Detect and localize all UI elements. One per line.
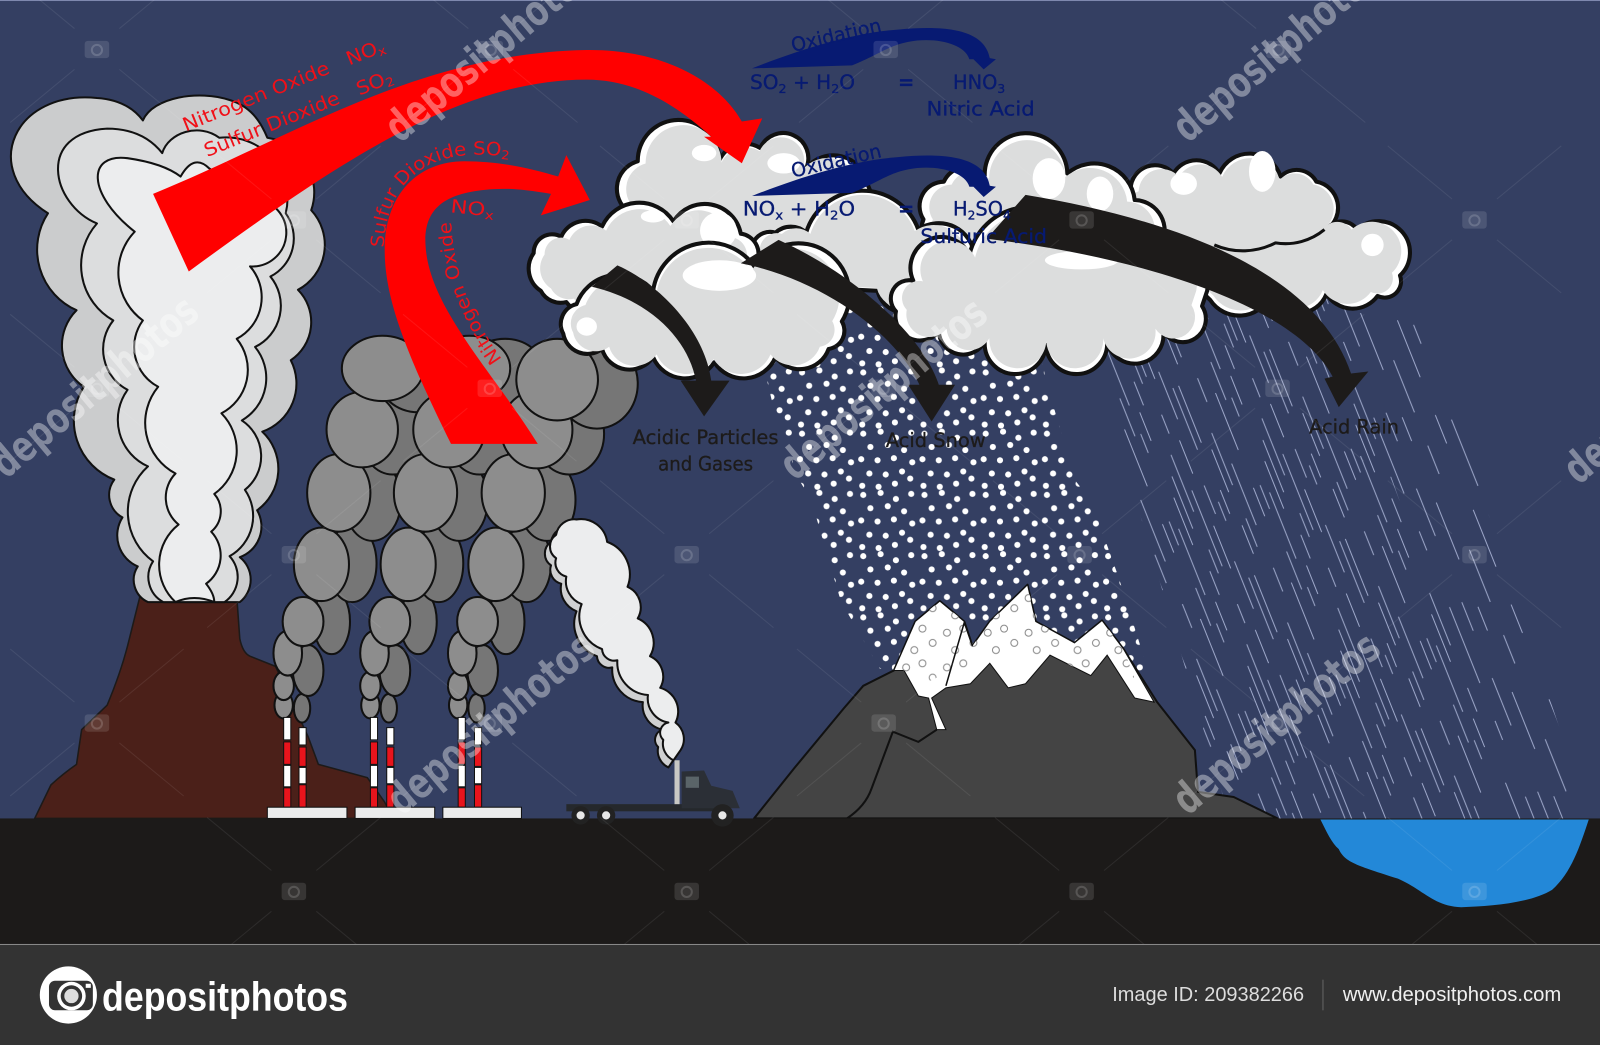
formula SO2 + H2O: + H: [787, 71, 831, 94]
front smoke columns: [273, 336, 598, 718]
equals sign: =: [898, 197, 914, 220]
mountain: [754, 585, 1278, 818]
volcano smoke plume: [11, 95, 325, 602]
label: nitrogen oxide: Nitrogen Oxide NO: [179, 45, 363, 136]
label: sulfur dioxide: Sulfur Dioxide SO: [201, 75, 373, 162]
oxidation label: Oxidation: [789, 139, 883, 182]
formula H2SO4: 2: [968, 208, 975, 222]
curved label: nitrogen oxide: Nitrogen Oxide: [438, 223, 501, 366]
equation: nitric acid: [750, 14, 1035, 120]
label: nitrogen oxide: x: [376, 43, 389, 59]
cloud front left: [561, 243, 850, 378]
formula HNO3: HNO: [953, 71, 997, 94]
truck cab: [682, 770, 740, 808]
truck flatbed: [566, 804, 719, 811]
snow dots: [759, 306, 1158, 704]
label: NOx: x: [484, 208, 494, 223]
label: acid rain: Acid Rain: [1309, 416, 1399, 439]
diagonal watermarks: depositphotos: [377, 623, 605, 825]
plume middle layer: [58, 129, 294, 602]
diagonal watermarks: depositphotos: [770, 288, 997, 490]
formula H2SO4: 4: [1003, 208, 1011, 222]
formula NOx + H2O: 2: [830, 208, 838, 222]
factory smoke: [273, 336, 638, 723]
cloud large right front: [891, 207, 1208, 374]
plume inner layer: [98, 158, 286, 602]
label: acidic particles and gases: Acidic Particles: [633, 426, 779, 449]
factory chimneys: [267, 717, 521, 818]
oxidation label: Oxidation: [789, 14, 883, 57]
formula HNO3: 3: [997, 82, 1005, 96]
nitric acid label: Nitric Acid: [927, 97, 1035, 120]
formula H2SO4: SO: [975, 197, 1003, 220]
ground: [0, 818, 1600, 944]
blue arrow: oxidation 1: [752, 28, 996, 69]
cloud top left: [617, 120, 888, 245]
curved label: sulfur dioxide: 2: [502, 150, 508, 160]
black arrow: acid snow: [741, 240, 955, 421]
clouds: [529, 120, 1410, 378]
formula SO2 + H2O: 2: [831, 82, 839, 96]
curved label: sulfur dioxide: Sulfur Dioxide SO: [370, 141, 500, 246]
formula NOx + H2O: x: [775, 208, 783, 222]
footer bar: [0, 944, 1600, 1045]
volcano: [35, 596, 393, 818]
cloud left: [529, 203, 759, 312]
footer logo icon: [40, 966, 97, 1024]
formula H2SO4: H: [953, 197, 968, 220]
black arrow: acidic particles: [592, 265, 730, 416]
diagonal watermarks: depositphotos: [1163, 623, 1390, 825]
image id: Image ID: 209382266: [1112, 984, 1304, 1006]
plume outer layer: [11, 95, 325, 602]
truck exhaust pipe: [674, 760, 680, 804]
equation: sulfuric acid: [743, 139, 1047, 248]
label: acidic particles and gases: [633, 426, 779, 475]
label: acid snow: Acid Snow: [886, 429, 986, 452]
formula SO2 + H2O: O: [839, 71, 855, 94]
truck wheels: [571, 804, 734, 827]
truck: [566, 760, 740, 827]
formula NOx + H2O: + H: [783, 197, 830, 220]
cloud right: [1112, 151, 1410, 316]
red arrow: factories to cloud: [385, 155, 590, 444]
cloud top middle: [920, 133, 1165, 286]
footer logo text: depositphotos: [102, 973, 348, 1019]
sulfuric acid label: Sulfuric Acid: [920, 225, 1047, 248]
red arrow: volcano to cloud: [153, 50, 762, 271]
snow cap: [894, 585, 1154, 730]
blue arrow: oxidation 2: [752, 156, 996, 197]
label: NOx: NO: [449, 196, 480, 220]
formula NOx + H2O: NO: [743, 197, 773, 220]
formula SO2 + H2O: SO: [750, 71, 778, 94]
cloud middle: [752, 191, 977, 313]
label: sulfur dioxide: 2: [384, 74, 397, 90]
rain streaks: [1082, 286, 1590, 818]
website url: www.depositphotos.com: [1342, 984, 1561, 1006]
truck exhaust smoke: [545, 519, 684, 767]
label: acidic particles and gases: and Gases: [658, 452, 753, 475]
formula SO2 + H2O: 2: [779, 82, 787, 96]
rear smoke columns: [293, 339, 638, 723]
diagonal watermarks: [0, 0, 1600, 825]
equals sign: =: [898, 71, 914, 94]
formula NOx + H2O: O: [838, 197, 855, 220]
black arrow: acid rain: [987, 195, 1368, 407]
lake: [1320, 819, 1589, 907]
